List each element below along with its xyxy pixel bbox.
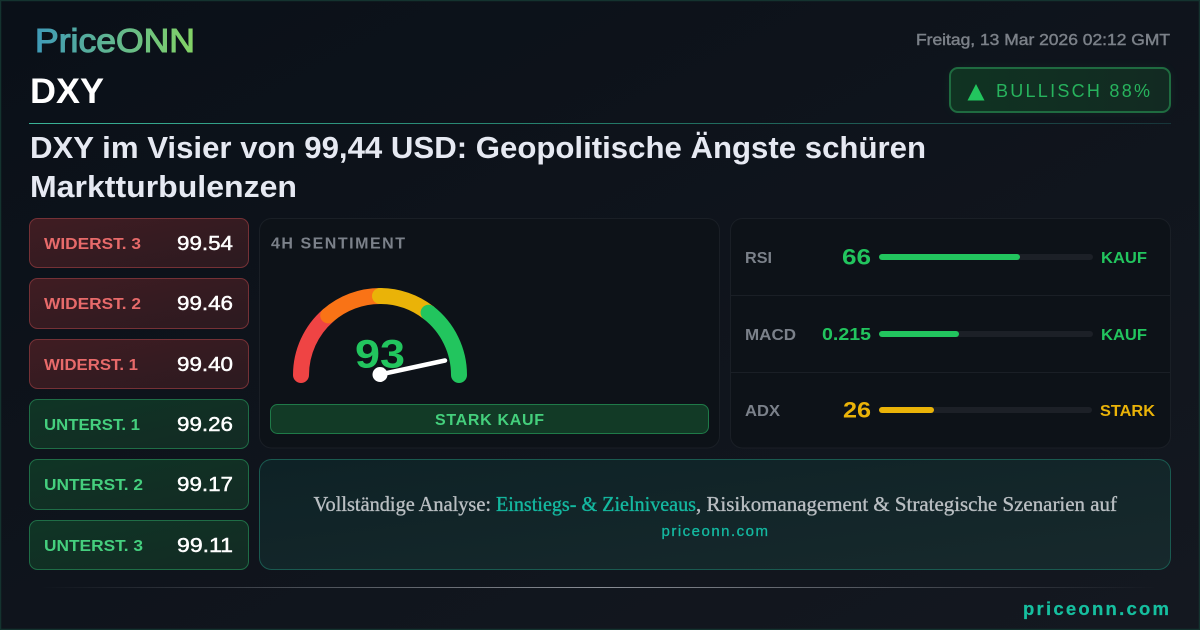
indicator: RSI: KAUF — [1101, 250, 1147, 267]
resistance level 1 — [30, 340, 248, 388]
icon: up triangle — [968, 84, 984, 100]
support level 2: UNTERST. 2 — [44, 477, 143, 494]
resistance level 3: WIDERST. 3 — [44, 236, 141, 253]
ticker symbol: DXY — [30, 72, 104, 111]
indicator: RSI — [745, 244, 1147, 270]
indicator: ADX — [745, 398, 1155, 422]
support level 1: 99.26 — [177, 414, 233, 436]
call to action sentence: Einstiegs- & Zielniveaus — [496, 492, 696, 516]
resistance level 3: 99.54 — [177, 233, 233, 255]
resistance level 2 — [30, 278, 248, 328]
call to action sentence — [314, 492, 1117, 516]
gauge needle — [372, 360, 445, 382]
indicator: RSI: 66 — [842, 244, 871, 270]
panel: technical indicators — [730, 218, 1170, 448]
support level 2 — [30, 460, 248, 510]
indicator: MACD: 0.215 — [822, 324, 871, 344]
resistance level 1: 99.40 — [177, 354, 233, 376]
support level 3 — [30, 520, 248, 570]
indicator: ADX: 26 — [843, 398, 871, 422]
indicator: MACD: MACD — [745, 327, 796, 344]
resistance level 3 — [30, 218, 248, 268]
call to action sentence: Vollständige Analyse: — [314, 492, 491, 516]
support level 1: UNTERST. 1 — [44, 417, 140, 434]
indicator: RSI: RSI — [745, 250, 772, 267]
panel heading: 4H SENTIMENT — [271, 236, 405, 252]
support level 2: 99.17 — [177, 474, 233, 496]
support level 3: UNTERST. 3 — [44, 538, 143, 555]
date and time: Freitag, 13 Mar 2026 02:12 GMT — [916, 32, 1170, 49]
logo: PriceONN: PriceONN — [35, 22, 195, 59]
resistance level 2: 99.46 — [177, 293, 233, 315]
panel: call to action — [260, 460, 1170, 570]
footer website: priceonn.com — [1023, 598, 1169, 619]
headline: Marktturbulenzen — [30, 169, 297, 204]
headline — [30, 130, 926, 204]
call to action sentence: , Risikomanagement & Strategische Szenarien auf — [696, 492, 1117, 516]
headline: DXY im Visier von 99,44 USD: Geopolitische Ängste schüren — [30, 130, 926, 165]
bullish badge: BULLISCH 88% — [996, 81, 1150, 101]
price levels column — [30, 218, 248, 570]
support level 3: 99.11 — [177, 535, 233, 557]
rating bar: strong buy — [270, 404, 708, 434]
indicator: ADX: STARK — [1100, 403, 1155, 420]
indicator: MACD: KAUF — [1101, 327, 1147, 344]
gauge value: 93 — [355, 332, 405, 376]
resistance level 2: WIDERST. 2 — [44, 296, 141, 313]
resistance level 1: WIDERST. 1 — [44, 357, 138, 374]
indicator: ADX: ADX — [745, 403, 780, 420]
call to action link: priceonn.com — [662, 523, 768, 540]
bullish badge — [950, 68, 1170, 112]
gauge arc — [301, 296, 459, 375]
panel: 4H sentiment gauge — [260, 218, 720, 448]
support level 1 — [30, 400, 248, 448]
indicator: MACD — [745, 324, 1147, 344]
rating bar: strong buy: STARK KAUF — [435, 412, 544, 429]
